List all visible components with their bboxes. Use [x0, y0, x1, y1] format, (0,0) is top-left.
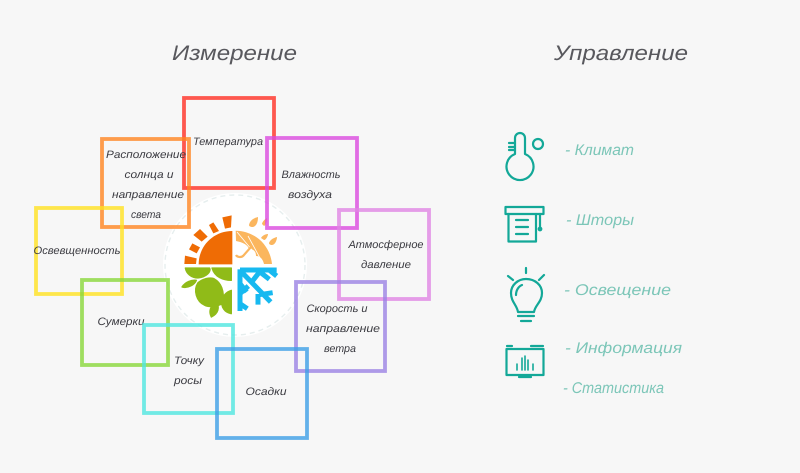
square: Расположение солнца: Расположение — [106, 149, 186, 161]
square: Осадки — [217, 349, 307, 438]
logo: snowflake — [240, 269, 277, 311]
square: Освещенность: Освевщенность — [34, 245, 121, 257]
square: Точку росы: Точку — [174, 355, 205, 367]
square: Скорость и направление ветра: ветра — [324, 343, 356, 355]
icon: light bulb — [508, 268, 544, 321]
square: Скорость и направление ветра — [296, 282, 385, 371]
square: Освещенность — [34, 208, 122, 294]
square: Температура: Температура — [193, 136, 263, 148]
square: Точку росы — [144, 325, 233, 413]
square: Расположение солнца: направление — [112, 189, 184, 201]
central circle — [163, 193, 307, 337]
label: Статистика: - Статистика — [563, 380, 664, 397]
label: Информация: - Информация — [565, 340, 682, 357]
square: Сумерки — [82, 280, 168, 365]
label: Шторы: - Шторы — [566, 212, 635, 229]
square: Атмосферное давление: Атмосферное — [347, 239, 424, 251]
square: Скорость и направление ветра: Скорость и — [306, 303, 368, 315]
square: Атмосферное давление: давление — [361, 259, 411, 271]
square: Влажность воздуха: воздуха — [288, 189, 332, 201]
logo: sun — [184, 215, 232, 264]
label: Освещение: - Освещение — [564, 282, 671, 299]
icon: statistics board — [506, 346, 544, 377]
icon: blinds — [506, 207, 544, 242]
square: Осадки: Осадки — [246, 386, 286, 398]
square: Влажность воздуха: Влажность — [282, 169, 341, 181]
icon: thermometer — [506, 133, 543, 180]
square: Точку росы: росы — [173, 375, 202, 387]
square: Расположение солнца: света — [131, 209, 161, 221]
heading: Измерение: Измерение — [172, 42, 297, 65]
square: Расположение солнца: солнца и — [124, 169, 174, 181]
square: Сумерки: Сумерки — [98, 316, 144, 328]
heading: Управление: Управление — [553, 42, 688, 65]
square: Скорость и направление ветра: направление — [306, 323, 380, 335]
square: Температура — [184, 98, 274, 188]
logo: plant — [182, 268, 231, 317]
square: Атмосферное давление — [339, 210, 429, 299]
square: Влажность воздуха — [267, 138, 357, 228]
logo: umbrella — [236, 217, 277, 264]
weather logo — [182, 215, 277, 317]
square: Расположение солнца — [102, 139, 189, 227]
label: Климат: - Климат — [565, 142, 634, 159]
